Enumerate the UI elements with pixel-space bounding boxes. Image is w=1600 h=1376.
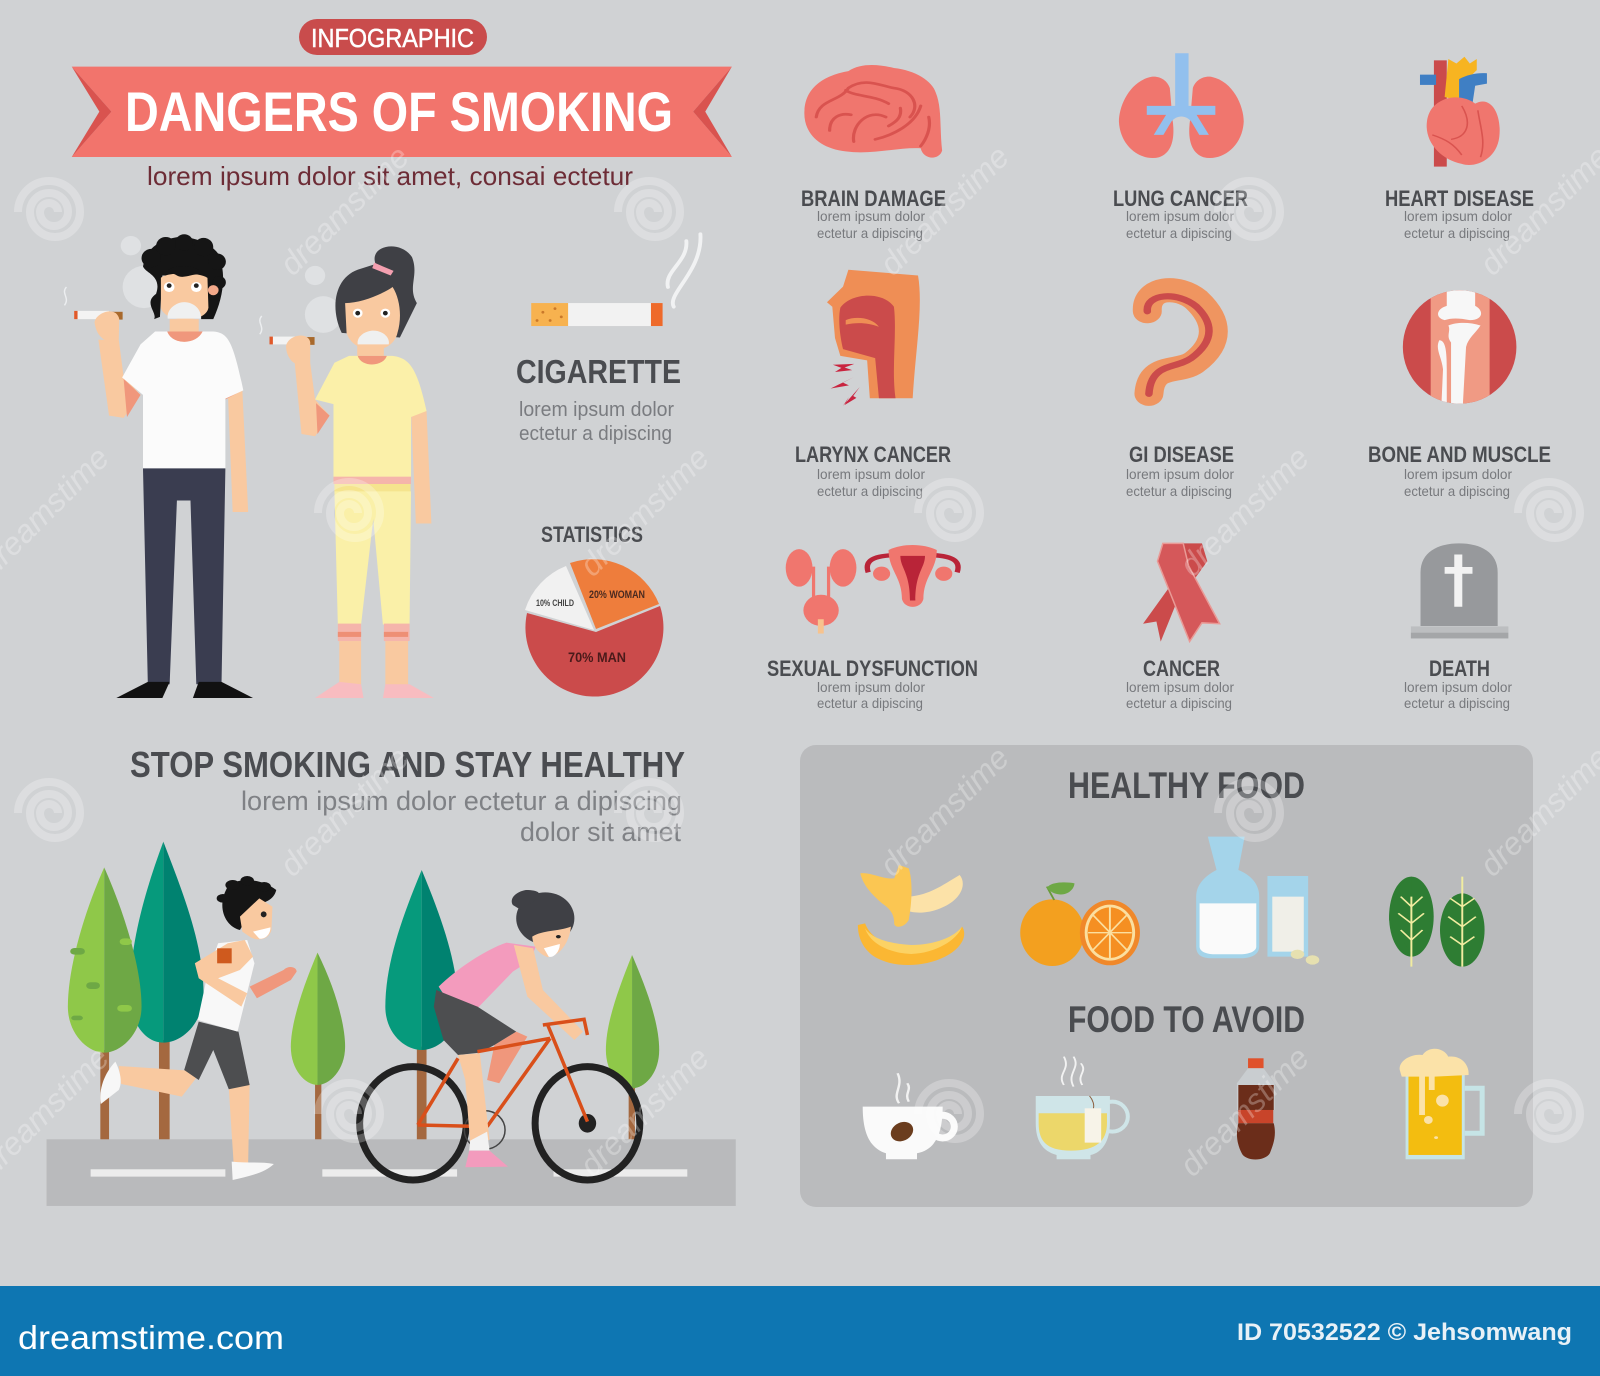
label: sexual dysfunction xyxy=(767,656,978,711)
icon: cigarette xyxy=(531,234,701,326)
watermark overlay: dreamstime xyxy=(572,439,716,583)
watermark overlay: dreamstime xyxy=(872,138,1016,282)
icon: coffee cup xyxy=(863,1073,954,1159)
label: heart disease: lorem ipsum dolor xyxy=(1404,208,1512,224)
label: gi disease: GI DISEASE xyxy=(1129,442,1234,467)
label: heart disease: ectetur a dipiscing xyxy=(1404,225,1510,241)
icon: beer mug xyxy=(1400,1049,1482,1159)
label: bone and muscle xyxy=(1368,442,1551,499)
illustration: man smoking xyxy=(64,234,253,698)
label: cancer: CANCER xyxy=(1143,656,1220,681)
label: brain damage: ectetur a dipiscing xyxy=(817,225,923,241)
label: lung cancer xyxy=(1113,186,1248,241)
watermark overlay: dreamstime xyxy=(272,138,416,282)
label: brain damage xyxy=(801,186,946,241)
label: larynx cancer: LARYNX CANCER xyxy=(795,442,951,467)
label: lung cancer: lorem ipsum dolor xyxy=(1126,208,1234,224)
label: bone and muscle: ectetur a dipiscing xyxy=(1404,483,1510,499)
stop smoking text xyxy=(241,786,682,847)
stop smoking text: lorem ipsum dolor ectetur a dipiscing xyxy=(241,786,682,816)
title banner: DANGERS OF SMOKING xyxy=(125,80,673,143)
cigarette text xyxy=(519,399,674,445)
label: cancer: lorem ipsum dolor xyxy=(1126,679,1234,695)
watermark overlay: dreamstime xyxy=(272,739,416,883)
heading: food to avoid: FOOD TO AVOID xyxy=(1068,999,1305,1040)
label: larynx cancer xyxy=(795,442,951,499)
label: death: ectetur a dipiscing xyxy=(1404,695,1510,711)
icon: leaves xyxy=(1389,877,1485,967)
label: gi disease: lorem ipsum dolor xyxy=(1126,466,1234,482)
cigarette heading: CIGARETTE xyxy=(516,353,681,390)
icon: tea glass xyxy=(1036,1057,1128,1159)
pie chart: statistics: 20% WOMAN xyxy=(589,589,645,601)
icon: larynx xyxy=(827,270,920,406)
illustration: cyclist on bicycle xyxy=(360,890,640,1180)
subtitle: lorem ipsum dolor sit amet, consai ectetur xyxy=(147,161,633,191)
title banner xyxy=(72,67,732,157)
statistics heading: STATISTICS xyxy=(541,522,643,547)
watermark overlay: dreamstime xyxy=(1172,439,1316,583)
icon: cola bottle xyxy=(1237,1058,1275,1160)
icon: heart xyxy=(1420,57,1500,167)
icon: bone and muscle xyxy=(1403,289,1516,405)
pie chart: statistics xyxy=(525,559,663,697)
stop smoking text: dolor sit amet xyxy=(520,817,681,847)
label: lung cancer: ectetur a dipiscing xyxy=(1126,225,1232,241)
label: heart disease xyxy=(1385,186,1534,241)
icon: stomach xyxy=(1147,290,1213,394)
pill label: infographic: INFOGRAPHIC xyxy=(311,23,474,53)
label: larynx cancer: lorem ipsum dolor xyxy=(817,466,925,482)
label: brain damage: lorem ipsum dolor xyxy=(817,208,925,224)
label: lung cancer: LUNG CANCER xyxy=(1113,186,1248,211)
footer bar: dreamstime.com xyxy=(18,1319,284,1356)
icon: lungs xyxy=(1119,53,1244,158)
watermark overlay: dreamstime xyxy=(872,739,1016,883)
footer bar xyxy=(0,1286,1600,1376)
label: larynx cancer: ectetur a dipiscing xyxy=(817,483,923,499)
label: death: DEATH xyxy=(1429,656,1490,681)
pie chart: statistics: 10% CHILD xyxy=(536,598,574,608)
trees xyxy=(68,842,659,1139)
watermark overlay: dreamstime xyxy=(1172,1039,1316,1183)
label: cancer xyxy=(1126,656,1234,711)
label: gi disease: ectetur a dipiscing xyxy=(1126,483,1232,499)
label: gi disease xyxy=(1126,442,1234,499)
label: bone and muscle: lorem ipsum dolor xyxy=(1404,466,1512,482)
heading: stop smoking: STOP SMOKING AND STAY HEALTHY xyxy=(130,744,685,785)
label: sexual dysfunction: SEXUAL DYSFUNCTION xyxy=(767,656,978,681)
footer bar: ID 70532522 © Jehsomwang xyxy=(1237,1319,1572,1346)
label: heart disease: HEART DISEASE xyxy=(1385,186,1534,211)
icon: gravestone xyxy=(1411,543,1508,638)
cigarette text: ectetur a dipiscing xyxy=(519,423,672,445)
label: bone and muscle: BONE AND MUSCLE xyxy=(1368,442,1551,467)
heading: healthy food: HEALTHY FOOD xyxy=(1068,765,1305,806)
illustration: woman smoking xyxy=(260,246,434,698)
label: death xyxy=(1404,656,1512,711)
label: cancer: ectetur a dipiscing xyxy=(1126,695,1232,711)
watermark overlay xyxy=(0,138,1600,1183)
label: brain damage: BRAIN DAMAGE xyxy=(801,186,946,211)
label: sexual dysfunction: lorem ipsum dolor xyxy=(817,679,925,695)
icon: milk bottle and glass xyxy=(1196,837,1319,965)
label: death: lorem ipsum dolor xyxy=(1404,679,1512,695)
pie chart: statistics: 70% MAN xyxy=(568,649,626,665)
watermark overlay: dreamstime xyxy=(572,1039,716,1183)
icon: urinary and reproductive xyxy=(786,545,958,634)
icon: orange xyxy=(1020,882,1140,966)
cigarette text: lorem ipsum dolor xyxy=(519,399,674,421)
icon: awareness ribbon xyxy=(1143,543,1220,642)
icon: bananas xyxy=(858,865,964,965)
panel: food xyxy=(800,745,1533,1207)
illustration: runner xyxy=(100,876,297,1180)
icon: brain xyxy=(804,65,942,158)
road xyxy=(47,1139,736,1206)
label: sexual dysfunction: ectetur a dipiscing xyxy=(817,695,923,711)
